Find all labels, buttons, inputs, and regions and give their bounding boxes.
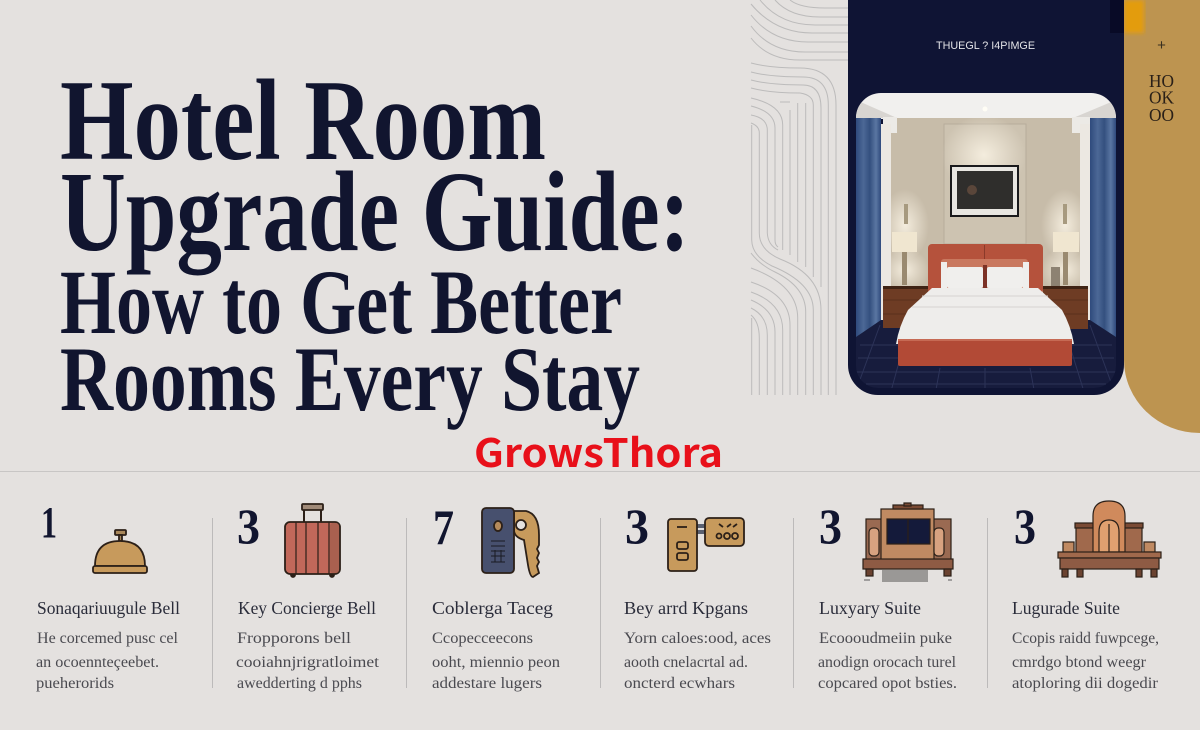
heading: Sonaqariuugule Bell bbox=[37, 598, 180, 618]
description: copcared opot bsties. bbox=[818, 675, 957, 692]
room illustration bbox=[856, 93, 1116, 395]
step 3 bbox=[432, 499, 560, 692]
number: 3 bbox=[237, 498, 260, 554]
description: anodign orocach turel bbox=[818, 654, 956, 671]
title: Rooms Every Stay bbox=[60, 328, 640, 430]
icon: service bell bbox=[93, 530, 147, 573]
card label: THUEGL ? I4PIMGE bbox=[936, 40, 1035, 52]
description bbox=[624, 630, 771, 692]
plus mark: + bbox=[1157, 37, 1166, 54]
curtains bbox=[856, 118, 881, 337]
description bbox=[236, 630, 380, 692]
heading: Luxyary Suite bbox=[819, 598, 921, 618]
step 2 bbox=[236, 498, 380, 692]
description bbox=[432, 630, 560, 692]
description: Ecoooudmeiin puke bbox=[819, 630, 952, 647]
title bbox=[60, 57, 690, 430]
description bbox=[1012, 630, 1159, 692]
step 1 bbox=[36, 498, 180, 692]
navy room card bbox=[848, 0, 1124, 395]
number: 3 bbox=[819, 498, 842, 554]
icon: key and card bbox=[482, 508, 539, 577]
divider bbox=[0, 471, 1200, 472]
heading: Bey arrd Kpgans bbox=[624, 598, 748, 618]
bedding bbox=[896, 288, 1074, 344]
side panel text: OK bbox=[1149, 88, 1174, 108]
description: an ocoennteçeebet. bbox=[36, 654, 159, 671]
title: How to Get Better bbox=[60, 251, 622, 353]
description: Ccopecceecons bbox=[432, 630, 533, 647]
description: awedderting d pphs bbox=[237, 675, 362, 692]
nightstands bbox=[883, 288, 929, 328]
icon: grand suite furniture bbox=[1058, 501, 1161, 577]
description: Fropporons bell bbox=[237, 630, 351, 647]
description bbox=[36, 630, 178, 692]
heading: Coblerga Taceg bbox=[432, 598, 553, 618]
orange corner block bbox=[1124, 0, 1144, 33]
heading: Lugurade Suite bbox=[1012, 598, 1120, 618]
number: 7 bbox=[433, 499, 454, 555]
side panel text: OO bbox=[1149, 105, 1174, 125]
icon: key card and tag bbox=[668, 518, 744, 571]
number: 1 bbox=[41, 498, 57, 547]
icon: luxury suite furniture bbox=[863, 503, 953, 582]
headboard bbox=[928, 244, 1043, 294]
description bbox=[818, 630, 957, 692]
bed base bbox=[898, 339, 1072, 366]
pelmets bbox=[883, 117, 897, 133]
gold side panel bbox=[1124, 0, 1200, 433]
number: 3 bbox=[625, 498, 649, 554]
sheer panels bbox=[881, 124, 891, 320]
description: pueherorids bbox=[36, 675, 114, 692]
description: atoploring dii dogedir bbox=[1012, 675, 1159, 692]
side panel text: HO bbox=[1149, 71, 1174, 91]
step 6 bbox=[1012, 498, 1161, 692]
description: aooth cnelacrtal ad. bbox=[624, 654, 748, 671]
description: ooht, miennio peon bbox=[432, 654, 560, 671]
ceiling bbox=[856, 93, 1116, 119]
description: He corcemed pusc cel bbox=[37, 630, 178, 647]
watermark: GrowsThora bbox=[474, 423, 723, 479]
icon: suitcase bbox=[285, 504, 340, 577]
description: Ccopis raidd fuwpcege, bbox=[1012, 630, 1159, 647]
number: 3 bbox=[1014, 498, 1036, 554]
sconces bbox=[904, 204, 908, 224]
framed picture bbox=[950, 165, 1019, 217]
step 5 bbox=[818, 498, 957, 692]
pillows bbox=[941, 259, 1028, 288]
title: Hotel Room bbox=[60, 57, 546, 185]
line pattern bbox=[751, 0, 848, 395]
wall bbox=[890, 118, 1080, 308]
description: cooiahnjrigratloimet bbox=[236, 654, 380, 671]
title: Upgrade Guide: bbox=[60, 148, 690, 275]
step 4 bbox=[624, 498, 771, 692]
floor bbox=[856, 320, 1116, 390]
lamps bbox=[892, 232, 917, 252]
side panel text bbox=[1149, 71, 1174, 125]
heading: Key Concierge Bell bbox=[238, 598, 376, 618]
description: oncterd ecwhars bbox=[624, 675, 735, 692]
description: Yorn caloes:ood, aces bbox=[624, 630, 771, 647]
description: addestare lugers bbox=[432, 675, 542, 692]
description: cmrdgo btond weegr bbox=[1012, 654, 1147, 671]
